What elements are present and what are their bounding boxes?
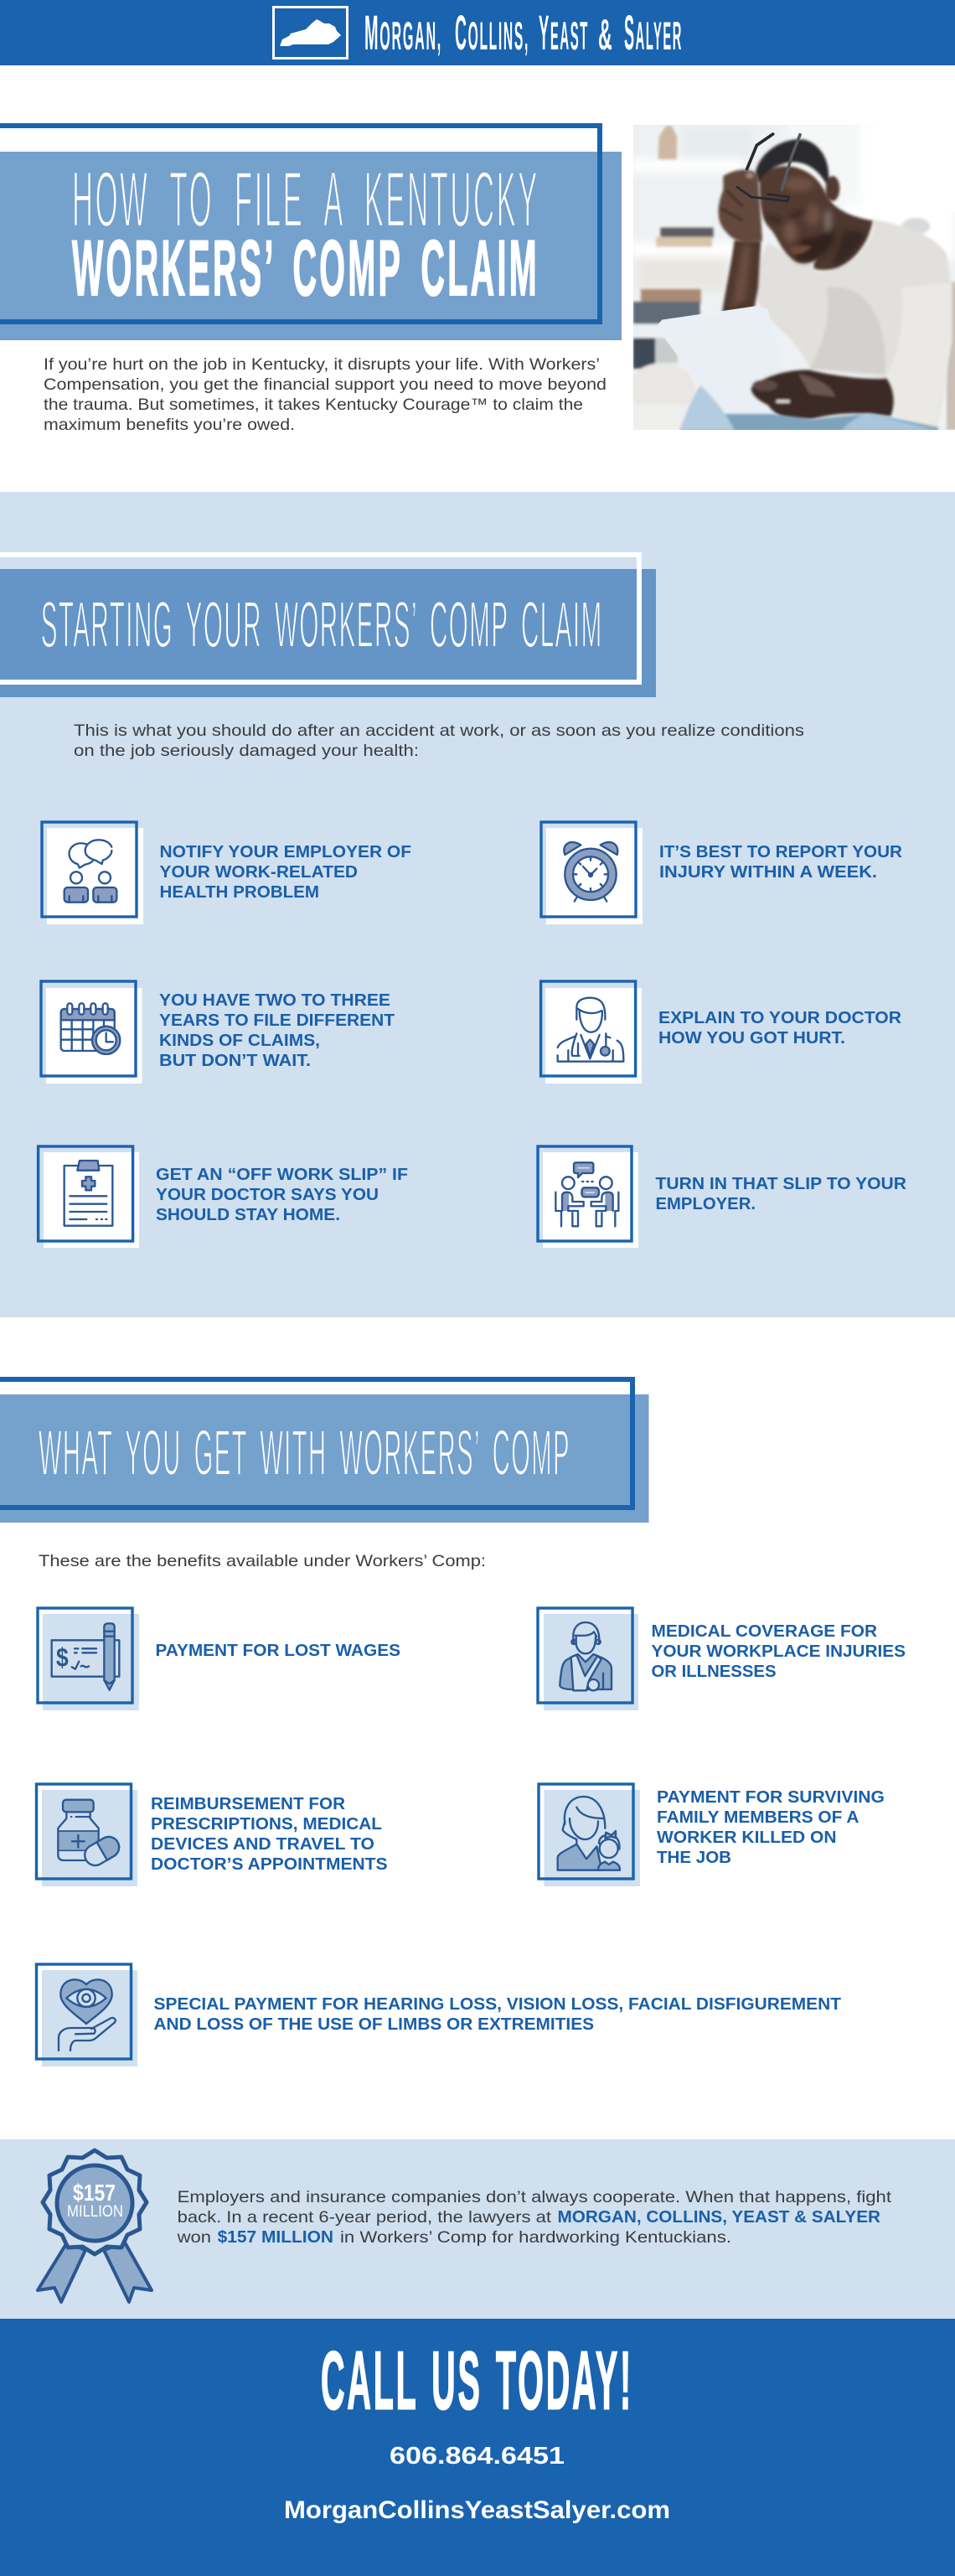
intro paragraph: maximum benefits you’re owed. (44, 416, 295, 434)
benefit text: DEVICES AND TRAVEL TO (151, 1834, 374, 1854)
icon: check and pen (52, 1623, 119, 1690)
benefit: medical coverage (538, 1608, 906, 1710)
icon: check and pen: $ (56, 1643, 69, 1673)
page header bar: SALYER (624, 6, 683, 60)
intro paragraph: Compensation, you get the financial support you need to move beyond (44, 375, 607, 394)
benefit text: REIMBURSEMENT FOR (151, 1794, 345, 1813)
step text: INJURY WITHIN A WEEK. (659, 862, 877, 882)
page header bar (0, 0, 955, 65)
firm name (364, 6, 683, 60)
logo: Kentucky state box (273, 7, 347, 59)
benefit: special payment (37, 1964, 841, 2066)
icon: calendar and clock (61, 1003, 120, 1054)
benefit text: FAMILY MEMBERS OF A (657, 1808, 860, 1827)
step text (159, 991, 395, 1070)
icon: medicine bottle and pill (58, 1800, 123, 1870)
step: off work slip (39, 1146, 408, 1248)
icon: $157 million award ribbon: MILLION (67, 2203, 123, 2221)
intro paragraph: If you’re hurt on the job in Kentucky, it disrupts your life. With Workers’ (44, 355, 600, 374)
firm name: COLLINS, (455, 6, 529, 60)
benefit: lost wages (38, 1608, 400, 1710)
intro paragraph (44, 355, 607, 434)
icon: heart, eye and hand (59, 1979, 116, 2051)
step text: YOUR DOCTOR SAYS YOU (156, 1185, 379, 1204)
benefit text: MEDICAL COVERAGE FOR (652, 1622, 877, 1641)
panel: starting your claim (0, 492, 955, 1317)
section intro text (74, 722, 804, 760)
firm name: MORGAN, (364, 6, 442, 60)
panel: intro hero (0, 120, 955, 434)
benefit text (657, 1787, 885, 1867)
icon: alarm clock (564, 842, 617, 902)
section intro text: This is what you should do after an accident at work, or as soon as you realize conditions (74, 722, 804, 740)
benefit text: DOCTOR’S APPOINTMENTS (151, 1854, 387, 1874)
benefit text: PRESCRIPTIONS, MEDICAL (151, 1814, 382, 1834)
step text: YEARS TO FILE DIFFERENT (159, 1011, 395, 1030)
callout text: $157 MILLION (218, 2227, 333, 2247)
step text (658, 1008, 901, 1047)
icon: $157 million award ribbon (38, 2150, 152, 2302)
callout text: back. In a recent 6-year period, the lawyers at (178, 2208, 552, 2227)
step: turn in slip (538, 1146, 906, 1248)
step text: YOUR WORK-RELATED (159, 862, 358, 882)
step text (655, 1174, 906, 1213)
step text: EXPLAIN TO YOUR DOCTOR (658, 1008, 901, 1027)
step text: TURN IN THAT SLIP TO YOUR (655, 1174, 906, 1193)
benefit text: PAYMENT FOR SURVIVING (657, 1787, 885, 1807)
step: notify employer (42, 822, 411, 924)
benefit: surviving family (539, 1784, 885, 1886)
step text (159, 842, 411, 902)
step text (659, 842, 902, 882)
callout text: in Workers’ Comp for hardworking Kentuckians. (340, 2228, 731, 2247)
neck and arm (722, 199, 873, 314)
benefit text: THE JOB (657, 1848, 731, 1867)
paper (657, 306, 771, 357)
step text: HEALTH PROBLEM (159, 882, 319, 902)
benefit text: SPECIAL PAYMENT FOR HEARING LOSS, VISION LOSS, FACIAL DISFIGUREMENT (154, 1994, 841, 2014)
section intro text: These are the benefits available under Workers’ Comp: (39, 1552, 486, 1570)
benefit text: AND LOSS OF THE USE OF LIMBS OR EXTREMITIES (154, 2015, 594, 2034)
step text: SHOULD STAY HOME. (156, 1205, 340, 1224)
step text: IT’S BEST TO REPORT YOUR (659, 842, 902, 861)
benefit text (154, 1994, 841, 2034)
step text: GET AN “OFF WORK SLIP” IF (156, 1165, 408, 1184)
head (756, 139, 839, 263)
step: deadline to file (41, 981, 395, 1084)
photo: man reading paperwork (628, 120, 955, 433)
step text: NOTIFY YOUR EMPLOYER OF (159, 842, 411, 861)
callout text (176, 2188, 892, 2247)
firm name: & (598, 11, 614, 59)
benefit text: YOUR WORKPLACE INJURIES (652, 1642, 906, 1661)
benefit text: WORKER KILLED ON (657, 1828, 836, 1847)
website: MorganCollinsYeastSalyer.com (284, 2496, 670, 2524)
step: report within a week (541, 822, 902, 924)
shirt (756, 220, 952, 429)
step text: BUT DON’T WAIT. (159, 1051, 311, 1070)
title block (0, 126, 622, 340)
intro paragraph: the trauma. But sometimes, it takes Kentucky Courage™ to claim the (44, 396, 583, 414)
icon: injured worker with sling (560, 1622, 612, 1690)
panel: results callout (0, 2139, 955, 2319)
panel: call to action footer (0, 2319, 955, 2576)
icon: meeting across table (555, 1162, 618, 1226)
section intro text: on the job seriously damaged your health: (74, 742, 419, 760)
benefit: prescriptions and travel (37, 1784, 387, 1886)
icon: clipboard with medical note (65, 1161, 112, 1226)
icon: doctor (558, 998, 623, 1062)
benefit text: PAYMENT FOR LOST WAGES (156, 1641, 400, 1660)
callout text: Employers and insurance companies don’t always cooperate. When that happens, fight (178, 2188, 892, 2206)
firm name: YEAST (539, 6, 589, 60)
step text: HOW YOU GOT HURT. (658, 1028, 845, 1047)
glasses (737, 134, 800, 201)
benefit text (151, 1794, 387, 1874)
icon: $157 million award ribbon: $157 (73, 2180, 116, 2206)
step text: YOU HAVE TWO TO THREE (159, 991, 390, 1010)
panel: what you get (0, 1379, 906, 2066)
section heading (0, 1379, 648, 1523)
icon: mother and child (558, 1797, 620, 1870)
callout text: MORGAN, COLLINS, YEAST & SALYER (558, 2207, 880, 2227)
callout text: won (176, 2228, 211, 2247)
section heading (0, 555, 656, 697)
step text (156, 1165, 408, 1224)
icon: two people talking (65, 840, 116, 903)
step text: KINDS OF CLAIMS, (159, 1031, 320, 1050)
step: explain to doctor (541, 981, 901, 1084)
benefit text (652, 1622, 906, 1681)
lower hand (751, 370, 894, 420)
hand on brow (718, 169, 762, 243)
benefit text: OR ILLNESSES (652, 1662, 776, 1681)
step text: EMPLOYER. (655, 1194, 756, 1213)
phone number: 606.864.6451 (390, 2443, 565, 2470)
jeans (680, 385, 938, 433)
